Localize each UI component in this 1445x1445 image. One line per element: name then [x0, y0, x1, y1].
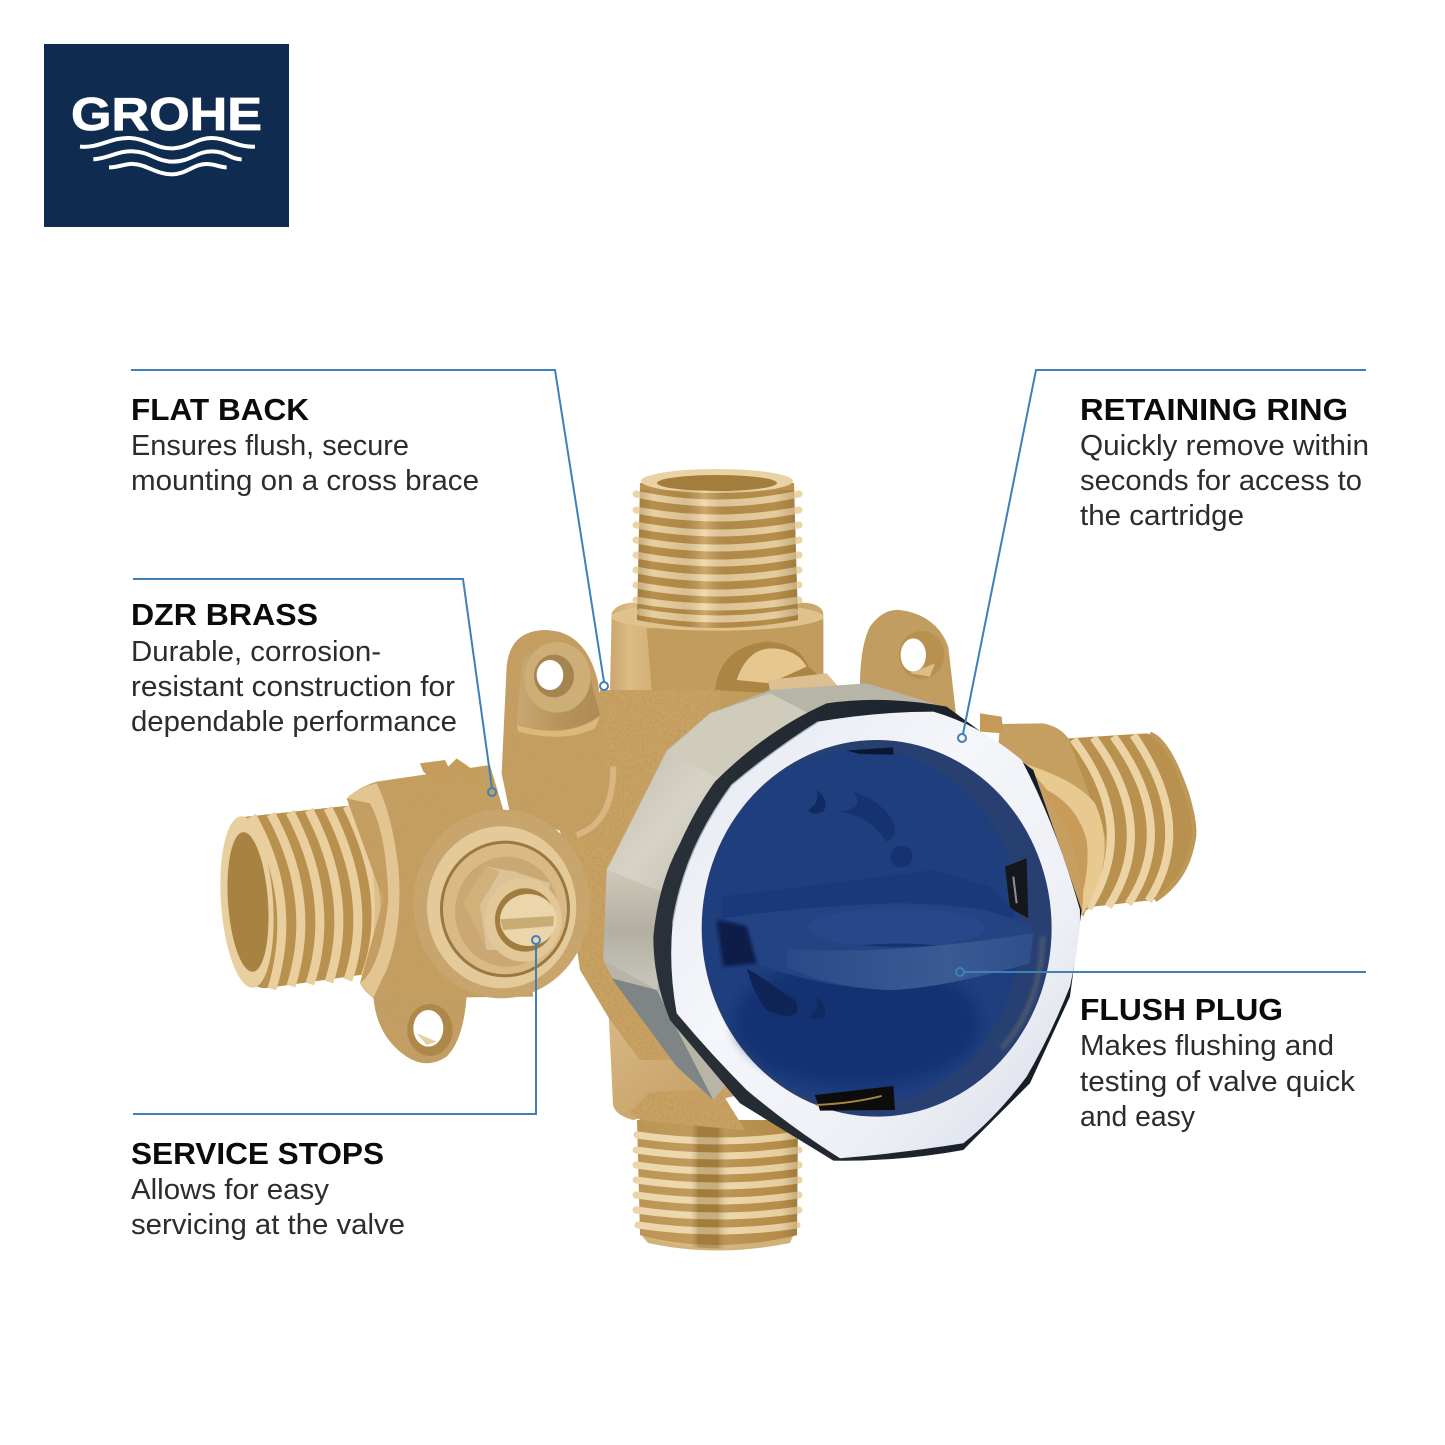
central body block with top collar [600, 603, 847, 827]
description: Ensures flush, secure [131, 430, 409, 462]
blue flush plug [702, 740, 1052, 1117]
description: Quickly remove within [1080, 430, 1369, 462]
heading: FLUSH PLUG [1080, 992, 1283, 1027]
plug handle [722, 903, 1033, 990]
right mounting lug [860, 610, 957, 720]
description: resistant construction for [131, 671, 456, 703]
chrome retaining ring [671, 712, 1080, 1158]
description: seconds for access to [1080, 465, 1362, 497]
description [131, 430, 479, 497]
slots [847, 747, 893, 755]
heading: DZR BRASS [131, 597, 318, 632]
logo: GROHE [44, 44, 289, 227]
description: Makes flushing and [1080, 1030, 1334, 1062]
left mounting lug, upper [502, 630, 617, 837]
description: dependable performance [131, 706, 457, 738]
description: the cartridge [1080, 500, 1244, 532]
description: mounting on a cross brace [131, 465, 479, 497]
bottom threaded pipe and body [608, 1000, 799, 1250]
heading: SERVICE STOPS [131, 1136, 384, 1171]
slot [500, 916, 554, 930]
logo wordmark: GROHE [71, 88, 262, 140]
right threaded pipe [1063, 733, 1194, 913]
heading: RETAINING RING [1080, 392, 1348, 427]
leader line: service stops [133, 936, 540, 1114]
black gasket [653, 700, 1082, 1161]
description: Durable, corrosion- [131, 636, 381, 668]
description [131, 1174, 405, 1241]
callout: retaining ring [1080, 392, 1369, 532]
lower left mounting lug [373, 997, 467, 1063]
callout: flat back [131, 392, 479, 497]
callout: service stops [131, 1136, 405, 1241]
hex nut [463, 867, 550, 950]
description: and easy [1080, 1101, 1196, 1133]
description [1080, 430, 1369, 532]
callout: flush plug [1080, 992, 1356, 1133]
right body boss [980, 713, 1107, 917]
plug bumps [808, 790, 826, 814]
leader line: retaining ring [958, 370, 1366, 742]
left body with bracket [347, 758, 533, 998]
central brass body [560, 690, 720, 1060]
leader line: flush plug [956, 968, 1366, 976]
left threaded pipe [215, 803, 391, 990]
callout: DZR brass [131, 597, 457, 738]
description [1080, 1030, 1356, 1133]
product illustration: rough-in valve [215, 469, 1194, 1250]
leader line: DZR brass [133, 579, 496, 796]
lower bowl shadow [733, 960, 980, 1087]
silver valve body [603, 683, 933, 1100]
service stop assembly [413, 810, 590, 998]
description: testing of valve quick [1080, 1066, 1356, 1098]
plug blade [722, 870, 1013, 930]
description [131, 636, 457, 738]
top threaded pipe [636, 469, 799, 628]
logo waves [80, 138, 255, 174]
description: servicing at the valve [131, 1209, 405, 1241]
description: Allows for easy [131, 1174, 330, 1206]
heading: FLAT BACK [131, 392, 310, 427]
leader line: flat back [131, 370, 608, 690]
